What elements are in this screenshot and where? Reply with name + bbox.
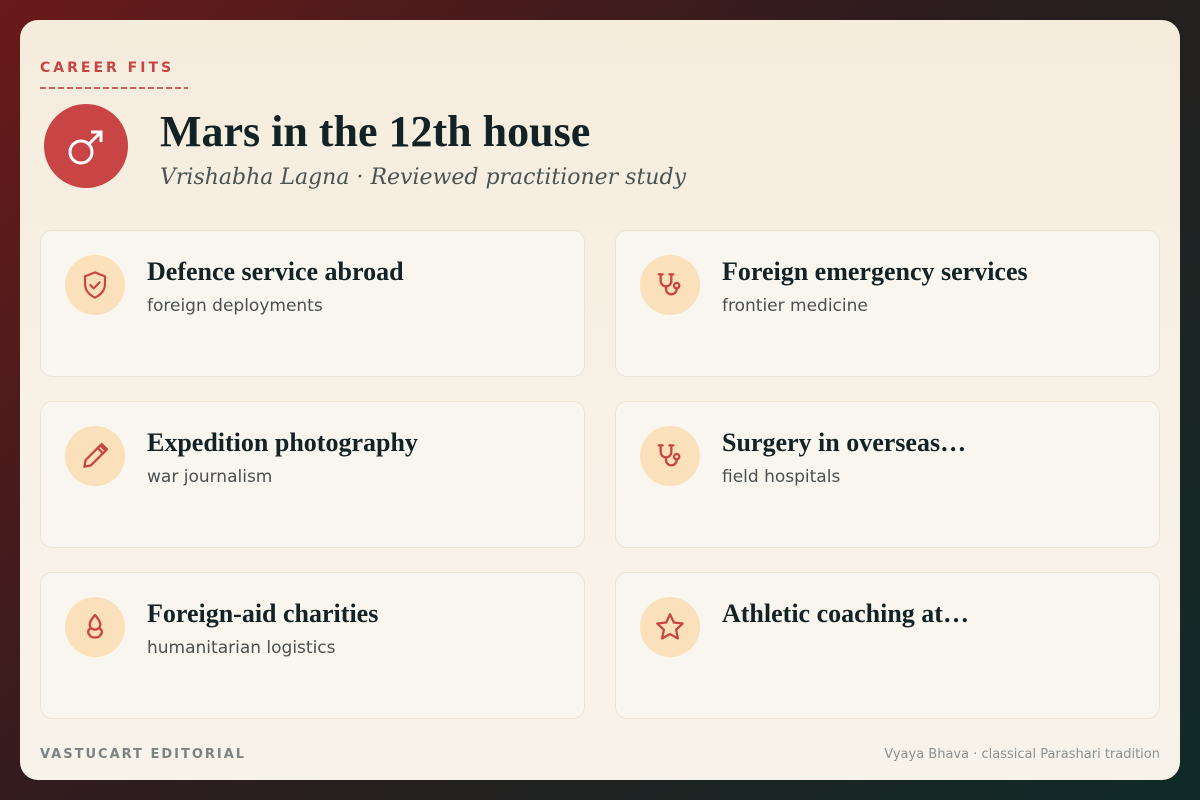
card: surgery [615,401,1160,548]
card: photography: Expedition photography [147,428,418,457]
icon: stethoscope [640,426,700,486]
footer right: Vyaya Bhava · classical Parashari tradition [884,747,1160,762]
icon: pen [65,426,125,486]
card: charities: Foreign-aid charities [147,599,378,628]
eyebrow label: CAREER FITS [40,60,174,76]
icon: mars symbol [44,104,128,188]
card: emergency: Foreign emergency services [722,257,1028,286]
subtitle: Vrishabha Lagna · Reviewed practitioner study [160,165,686,190]
card: emergency [615,230,1160,377]
footer left: VASTUCART EDITORIAL [40,747,246,762]
card: emergency: frontier medicine [722,296,868,316]
card: photography: war journalism [147,467,272,487]
card: surgery: field hospitals [722,467,840,487]
card: charities [40,572,585,719]
icon: shield [65,255,125,315]
icon: drop [65,597,125,657]
card: athletic: Athletic coaching at… [722,599,969,628]
card: athletic [615,572,1160,719]
icon: stethoscope [640,255,700,315]
card: defence [40,230,585,377]
card: charities: humanitarian logistics [147,638,336,658]
icon: star [640,597,700,657]
card: defence: foreign deployments [147,296,323,316]
card: defence: Defence service abroad [147,257,404,286]
card: photography [40,401,585,548]
card: surgery: Surgery in overseas… [722,428,966,457]
title: Mars in the 12th house [160,107,590,156]
